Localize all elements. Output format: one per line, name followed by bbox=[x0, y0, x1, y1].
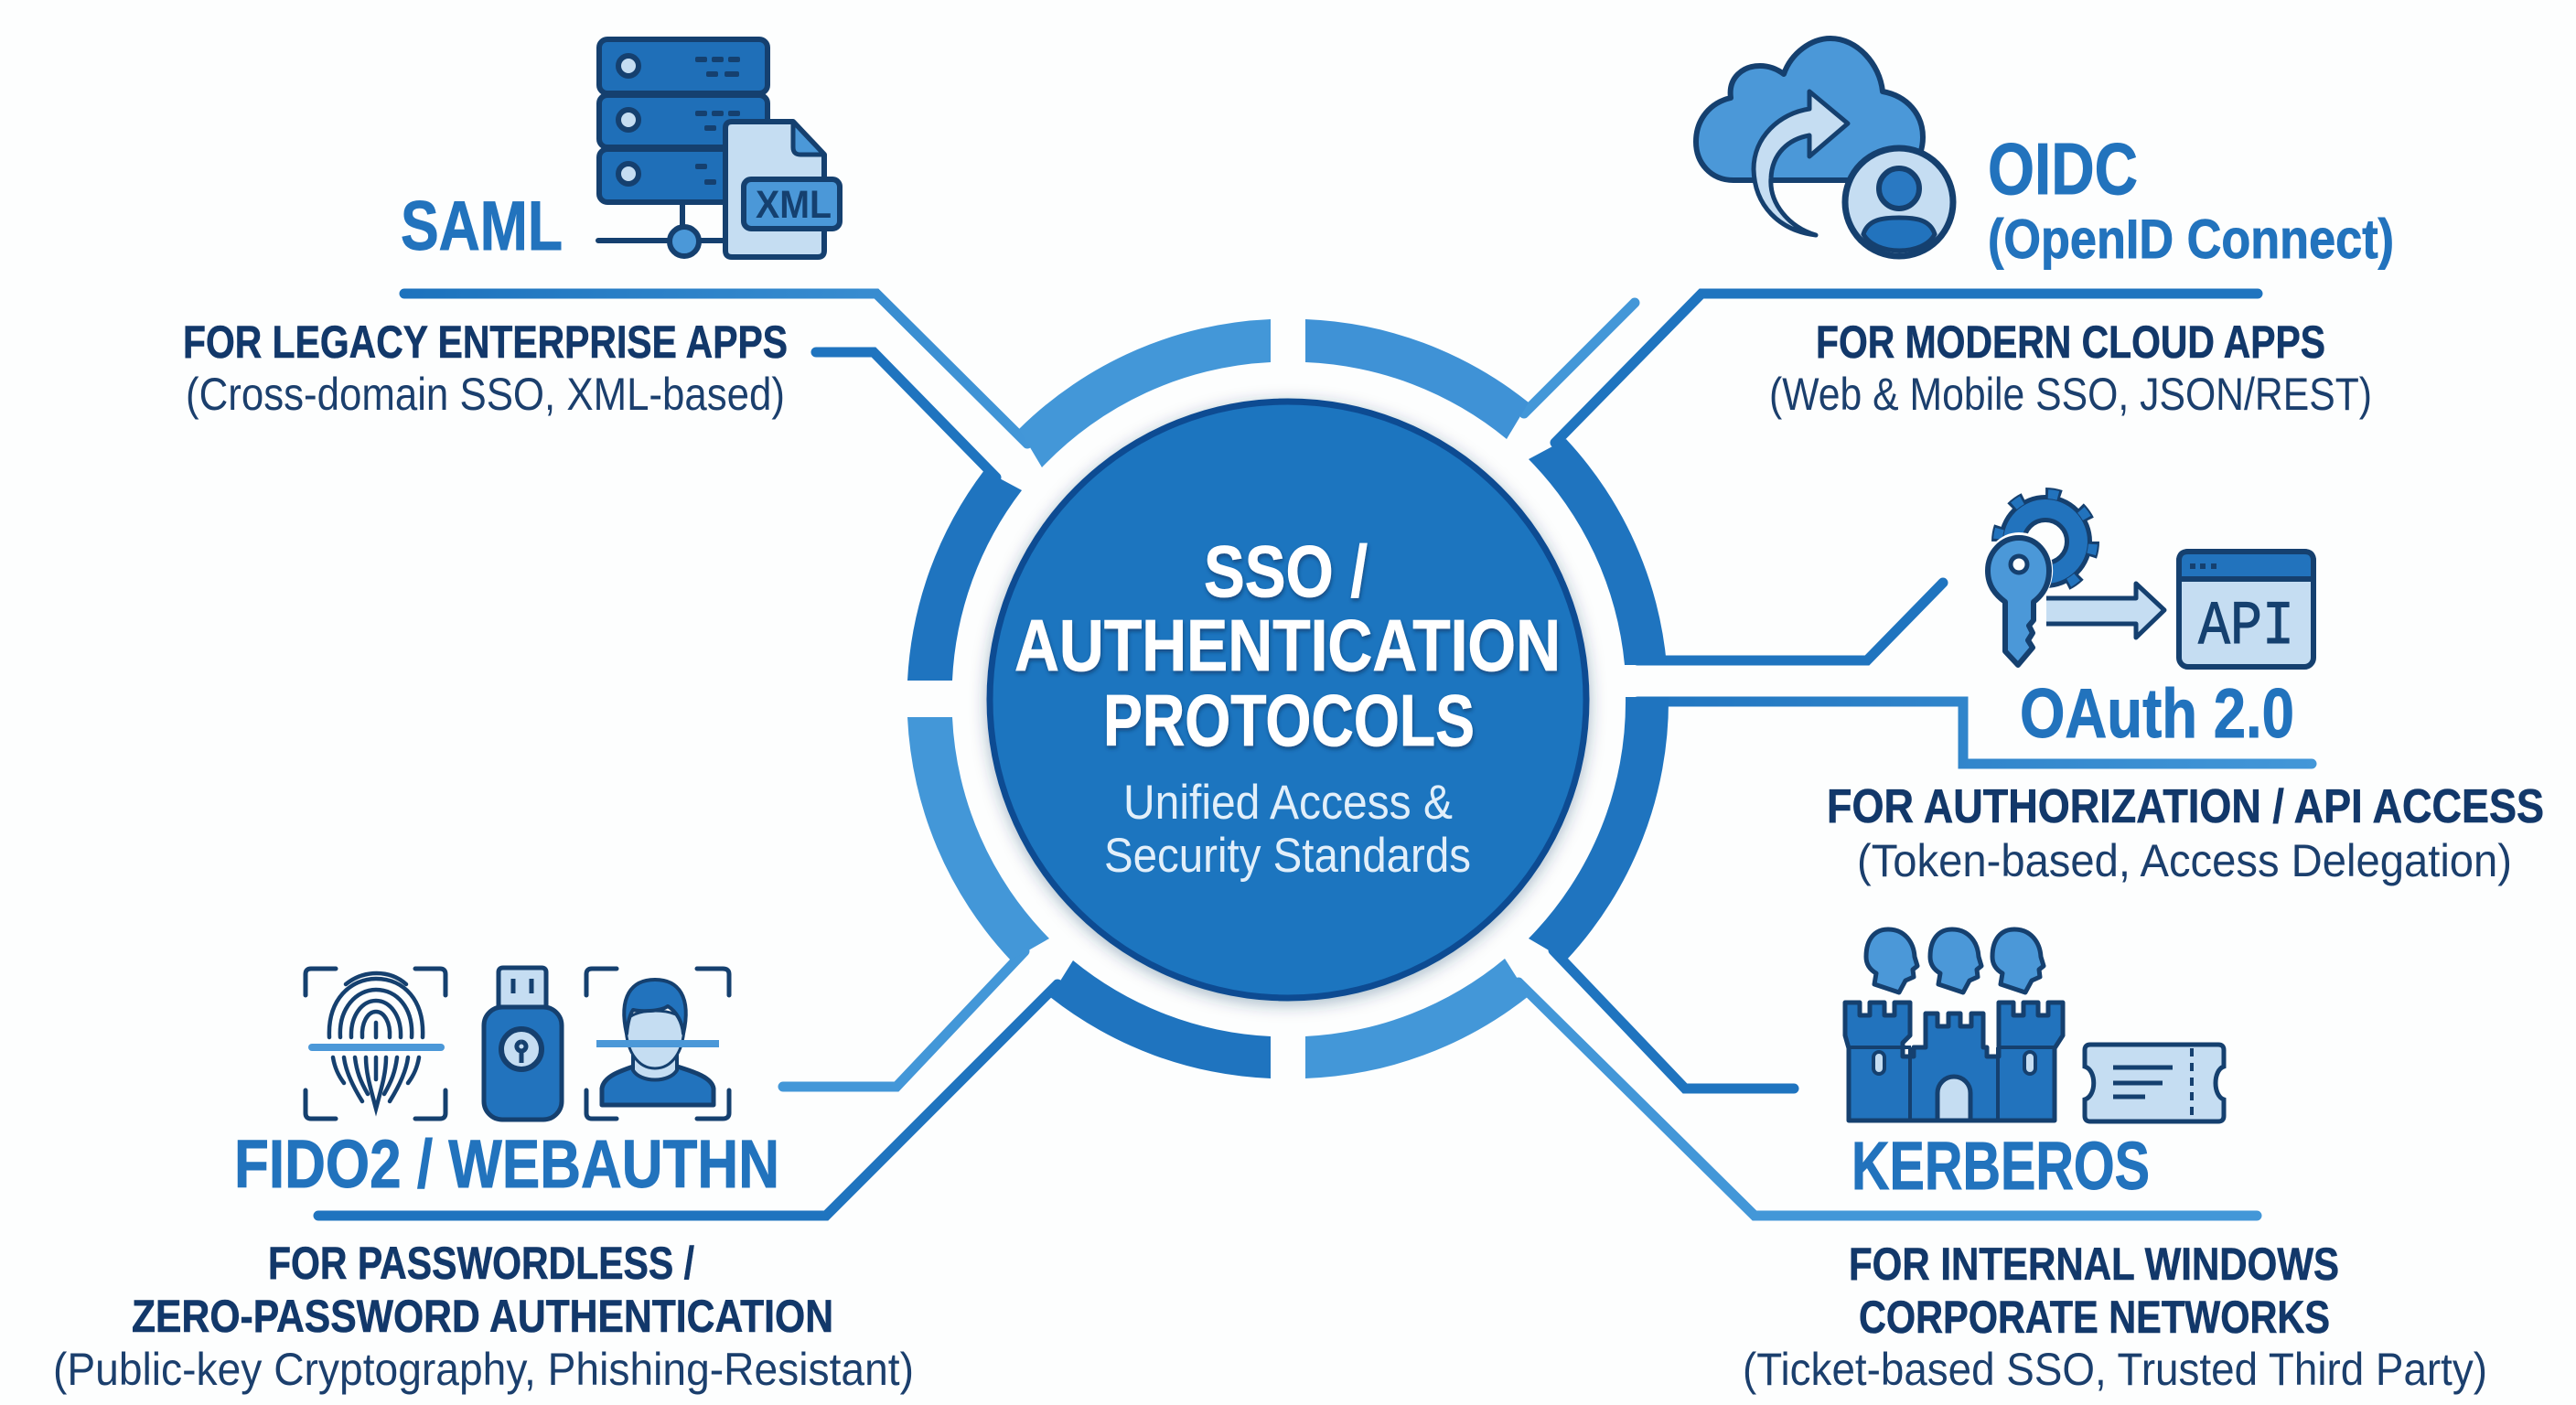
text: SAML description: FOR LEGACY ENTERPRISE APPS bbox=[183, 316, 788, 368]
heading: KERBEROS: KERBEROS bbox=[1852, 1128, 2150, 1204]
connector: OAuth lower bbox=[1637, 702, 2312, 764]
subtitle: Unified Access & bbox=[1123, 776, 1453, 830]
heading: FIDO2 / WEBAUTHN: FIDO2 / WEBAUTHN bbox=[234, 1126, 779, 1202]
icon: server with XML document bbox=[598, 39, 840, 257]
text: SAML description: (Cross-domain SSO, XML-based) bbox=[186, 369, 785, 420]
text: OIDC description bbox=[1769, 316, 2372, 420]
icon: castle heads and ticket bbox=[1845, 929, 2224, 1121]
heading: OAuth 2.0: OAuth 2.0 bbox=[2020, 675, 2294, 753]
title: SSO / bbox=[1204, 531, 1368, 612]
connector: FIDO upper bbox=[783, 951, 1025, 1087]
title bbox=[1014, 531, 1561, 761]
icon: cloud with arrow and user bbox=[1696, 38, 1953, 256]
subtitle: Security Standards bbox=[1104, 829, 1471, 883]
text: FIDO2 description: FOR PASSWORDLESS / bbox=[268, 1238, 694, 1289]
heading: OIDC: OIDC bbox=[1988, 128, 2138, 209]
text: FIDO2 description: ZERO-PASSWORD AUTHENTICATION bbox=[132, 1291, 833, 1342]
subtitle bbox=[1104, 776, 1471, 883]
text: Kerberos description: FOR INTERNAL WINDOWS bbox=[1849, 1239, 2339, 1290]
text: Kerberos description: CORPORATE NETWORKS bbox=[1859, 1292, 2330, 1343]
title: PROTOCOLS bbox=[1103, 680, 1475, 761]
text: Kerberos description: (Ticket-based SSO, Trusted Third Party) bbox=[1743, 1344, 2487, 1395]
heading: OIDC bbox=[1988, 128, 2394, 270]
connector: Kerberos lower bbox=[1519, 982, 2257, 1216]
text: FIDO2 description: (Public-key Cryptography, Phishing-Resistant) bbox=[53, 1344, 914, 1395]
text: OAuth description bbox=[1827, 780, 2544, 886]
connector: SAML upper bbox=[404, 294, 1027, 444]
central circle bbox=[990, 402, 1586, 998]
connector: Kerberos upper bbox=[1553, 950, 1794, 1089]
connector: OIDC upper bbox=[1555, 294, 2258, 443]
icon: server with XML document: XML bbox=[756, 183, 832, 227]
text: OIDC description: (Web & Mobile SSO, JSON/REST) bbox=[1769, 369, 2372, 420]
text: SAML description bbox=[183, 316, 788, 420]
text: OIDC description: FOR MODERN CLOUD APPS bbox=[1816, 316, 2325, 368]
text: FIDO2 description bbox=[53, 1238, 914, 1395]
heading: SAML: SAML bbox=[401, 188, 563, 265]
connector: FIDO lower bbox=[318, 984, 1057, 1216]
text: OAuth description: (Token-based, Access Delegation) bbox=[1857, 835, 2512, 886]
connector: OAuth upper bbox=[1637, 583, 1943, 660]
central ring bbox=[907, 319, 1669, 1078]
icon: fingerprint, security key and face scan bbox=[306, 968, 729, 1120]
title: AUTHENTICATION bbox=[1014, 605, 1561, 686]
connector: SAML lower bbox=[816, 352, 996, 477]
heading: OIDC: (OpenID Connect) bbox=[1988, 209, 2394, 270]
text: Kerberos description bbox=[1743, 1239, 2487, 1395]
icon: key, gear, arrow and API window: API bbox=[2198, 592, 2294, 662]
connector: OIDC short bbox=[1524, 303, 1635, 413]
icon: key, gear, arrow and API window bbox=[1984, 493, 2313, 670]
